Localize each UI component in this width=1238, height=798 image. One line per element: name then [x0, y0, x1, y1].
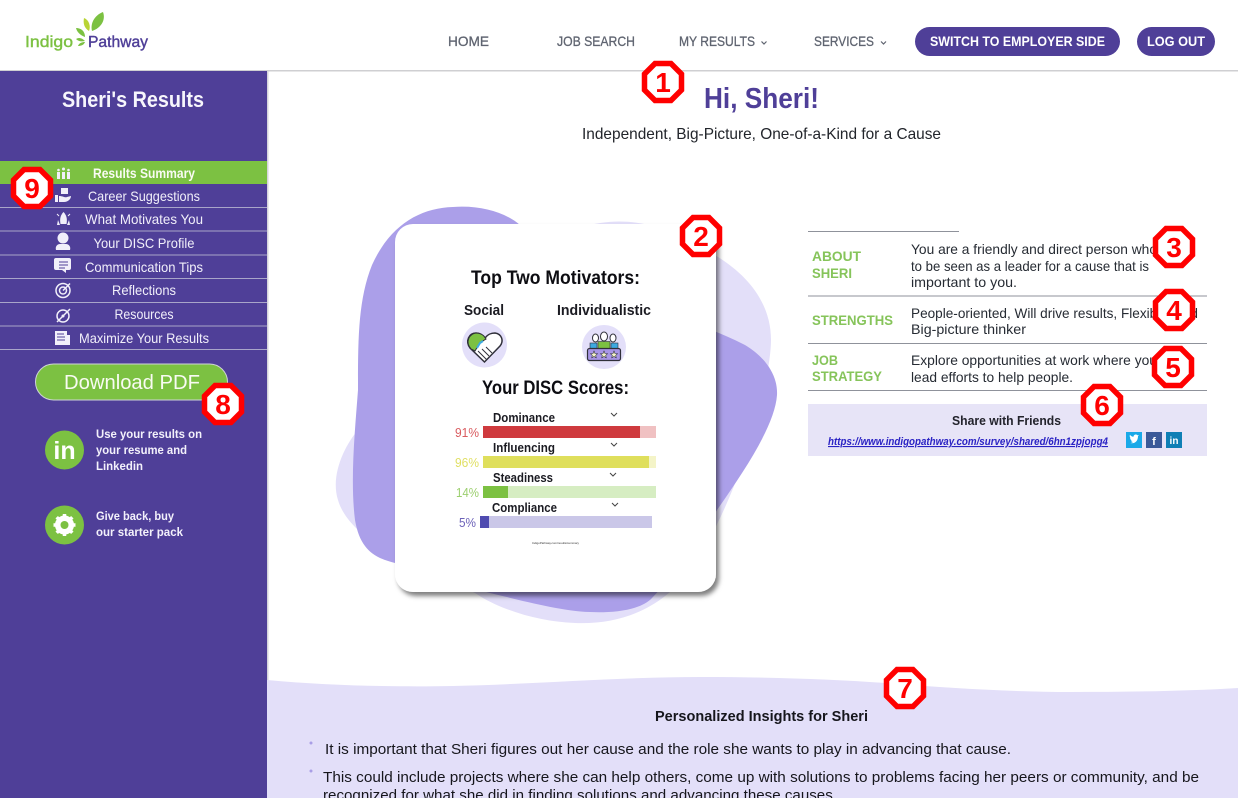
panel: results card: [395, 224, 716, 592]
linkedin promo: [45, 427, 202, 473]
button: download PDF: [36, 364, 228, 400]
insight bullet 1: It is important that Sheri figures out her cause and the role she wants to play in advancing that cause.: [325, 741, 1011, 758]
navigation links: HOME: [448, 33, 489, 49]
marker 3: 3: [1166, 232, 1182, 263]
bar: influencing: 96%: [455, 455, 479, 470]
marker 2: [682, 218, 720, 254]
bar: compliance: [459, 500, 652, 530]
panel: share with friends: [808, 404, 1207, 456]
row: strengths: Big-picture thinker: [911, 321, 1026, 337]
social icons: in: [1170, 436, 1178, 447]
motivators heading: Top Two Motivators:: [471, 268, 640, 289]
marker 7: [886, 670, 924, 706]
sidebar menu: Results Summary: [93, 165, 195, 181]
button: switch to employer side: [915, 27, 1120, 56]
sidebar title: Sheri's Results: [62, 87, 204, 112]
panel: sidebar: [0, 71, 268, 798]
marker 5: 5: [1165, 352, 1181, 383]
bar: influencing: Influencing: [493, 440, 555, 455]
navigation links: JOB SEARCH: [557, 33, 635, 49]
marker 5: [1154, 348, 1192, 386]
row: about: [812, 241, 1157, 290]
background blobs: [336, 207, 777, 623]
linkedin promo: Linkedin: [96, 459, 143, 473]
motivator: social: [462, 302, 507, 368]
share link: https://www.indigopathway.com/survey/shared/6hn1zpjopg4: [828, 436, 1108, 448]
panel: personalized insights: [267, 677, 1238, 798]
row: strengths: [812, 305, 1198, 337]
marker 9: 9: [24, 173, 40, 204]
row: job strategy: STRATEGY: [812, 368, 883, 384]
marker 8: [204, 386, 242, 422]
sidebar menu: Career Suggestions: [88, 188, 200, 204]
insight bullet 2: [310, 769, 1199, 798]
logo: Indigo Pathway: [25, 12, 148, 51]
marker 9: [14, 170, 50, 206]
bar: steadiness: 14%: [456, 485, 479, 500]
button: switch to employer side: SWITCH TO EMPLOYER SIDE: [930, 33, 1105, 49]
marker 4: 4: [1166, 295, 1182, 326]
button: log out: LOG OUT: [1147, 33, 1205, 49]
menu icons: [54, 168, 71, 345]
starter pack promo: [45, 506, 183, 544]
sidebar menu: Your DISC Profile: [94, 235, 195, 251]
marker 7: 7: [897, 673, 913, 704]
bar: compliance: Compliance: [492, 500, 557, 515]
row: job strategy: [812, 352, 1157, 385]
marker 1: [644, 64, 682, 100]
sidebar menu: Reflections: [112, 282, 176, 298]
sidebar menu: Maximize Your Results: [79, 330, 209, 346]
social icons: [1126, 432, 1182, 448]
row: about: to be seen as a leader for a cause that is: [911, 258, 1149, 274]
card footnote: IndigoPathway.com/results/summary: [532, 541, 579, 545]
marker 1: 1: [655, 67, 671, 98]
logo: Indigo Pathway: Pathway: [88, 34, 148, 51]
row: strengths: People-oriented, Will drive results, Flexible, and: [911, 305, 1198, 321]
row: strengths: STRENGTHS: [812, 312, 893, 328]
bar: dominance: Dominance: [493, 410, 555, 425]
social icons: f: [1152, 436, 1156, 448]
marker 6: [1084, 386, 1120, 424]
button: download PDF: Download PDF: [64, 372, 200, 394]
insight bullet 2: This could include projects where she can help others, come up with solutions to problems facing her peers or community, and be: [323, 769, 1199, 786]
marker 4: [1156, 292, 1192, 328]
motivator: individualistic: Individualistic: [557, 302, 651, 319]
marker 2: 2: [693, 221, 709, 252]
bar: dominance: 91%: [455, 425, 479, 440]
tagline: Independent, Big-Picture, One-of-a-Kind for a Cause: [582, 126, 941, 143]
panel: summary table: [808, 232, 1207, 390]
marker 6: 6: [1094, 390, 1110, 421]
row: about: SHERI: [812, 265, 852, 281]
sidebar menu: Communication Tips: [85, 259, 203, 275]
navigation links: SERVICES: [814, 33, 874, 49]
marker 8: 8: [215, 389, 231, 420]
linkedin promo: your resume and: [96, 443, 187, 457]
insights heading: Personalized Insights for Sheri: [655, 708, 868, 725]
row: about: You are a friendly and direct person who: [911, 241, 1157, 257]
bar: steadiness: Steadiness: [493, 470, 553, 485]
row: job strategy: JOB: [812, 352, 838, 368]
navigation links: [448, 33, 886, 49]
starter pack promo: Give back, buy: [96, 509, 174, 523]
linkedin promo: Use your results on: [96, 427, 202, 441]
marker 3: [1156, 228, 1192, 266]
row: job strategy: Explore opportunities at work where you: [911, 352, 1157, 368]
sidebar menu: Resources: [114, 306, 174, 322]
greeting heading: Hi, Sheri!: [704, 83, 819, 115]
motivator: social: Social: [464, 302, 504, 319]
header bar: [0, 0, 1238, 72]
bar: dominance: [455, 410, 656, 440]
row: about: ABOUT: [812, 248, 861, 264]
DISC heading: Your DISC Scores:: [482, 378, 629, 399]
sidebar menu: [0, 161, 267, 350]
motivator: individualistic: [557, 302, 651, 369]
row: job strategy: lead efforts to help people.: [911, 369, 1073, 385]
bar: steadiness: [456, 470, 656, 500]
row: about: important to you.: [911, 274, 1017, 290]
panel: share with friends: Share with Friends: [952, 413, 1061, 428]
navigation links: MY RESULTS: [679, 33, 755, 49]
button: log out: [1137, 27, 1215, 56]
starter pack promo: our starter pack: [96, 525, 183, 539]
bar: influencing: [455, 440, 656, 470]
sidebar menu: What Motivates You: [85, 211, 203, 227]
linkedin promo: in: [53, 437, 76, 465]
bar: compliance: 5%: [459, 515, 476, 530]
logo: Indigo Pathway: Indigo: [25, 34, 73, 51]
